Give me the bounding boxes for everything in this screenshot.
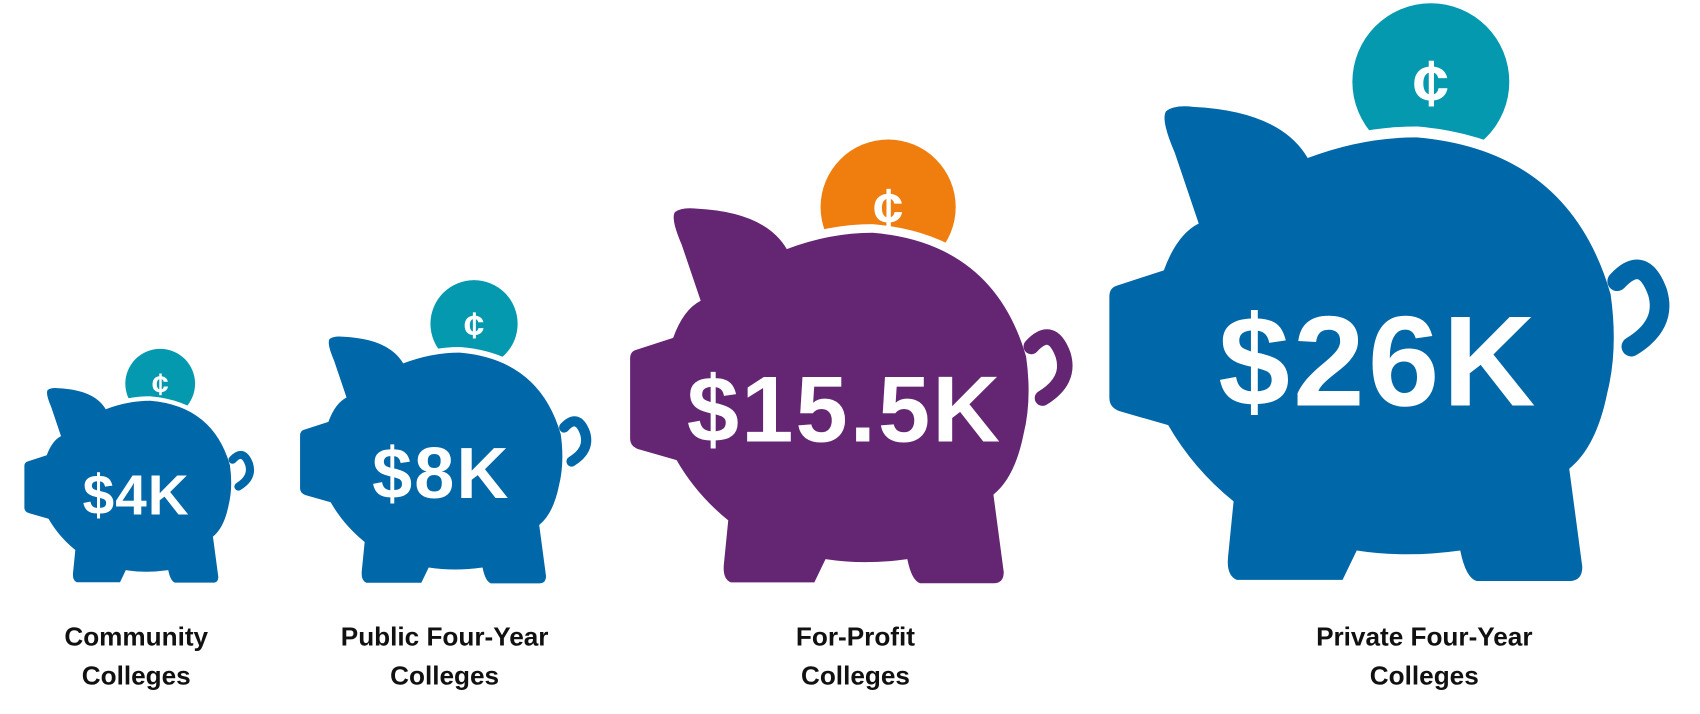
piggy bank: public four-year: [300, 280, 586, 583]
value: $26K: $26K: [1218, 290, 1539, 434]
coin: for-profit: ¢: [873, 178, 903, 239]
coin: community: ¢: [152, 368, 169, 402]
label: private four-year colleges: Colleges: [1370, 661, 1479, 691]
pig: community: [24, 388, 250, 583]
label: community colleges: Community: [64, 621, 209, 651]
label: for-profit colleges: Colleges: [801, 661, 910, 691]
pig: for-profit: [630, 208, 1065, 583]
coin: private: [1352, 3, 1509, 160]
piggy bank: private four-year: [1109, 3, 1660, 581]
label: public four-year colleges: Public Four-Year: [341, 621, 548, 651]
value: $4K: $4K: [83, 465, 190, 528]
value: $8K: $8K: [372, 434, 511, 514]
coin: community: [125, 349, 195, 419]
label: for-profit colleges: For-Profit: [796, 621, 915, 651]
coin: private: ¢: [1413, 47, 1449, 120]
coin: public: [430, 280, 518, 367]
piggy bank: for-profit: [630, 140, 1065, 583]
coin: public: ¢: [464, 304, 484, 346]
pig: private: [1109, 106, 1660, 581]
label: private four-year colleges: Private Four-Year: [1316, 621, 1533, 651]
coin: for-profit: [821, 140, 956, 275]
label: community colleges: Colleges: [82, 661, 191, 691]
label: public four-year colleges: Colleges: [390, 661, 499, 691]
pig: public: [300, 337, 586, 583]
value: $15.5K: $15.5K: [687, 356, 1002, 461]
piggy bank: community colleges: [24, 349, 250, 583]
